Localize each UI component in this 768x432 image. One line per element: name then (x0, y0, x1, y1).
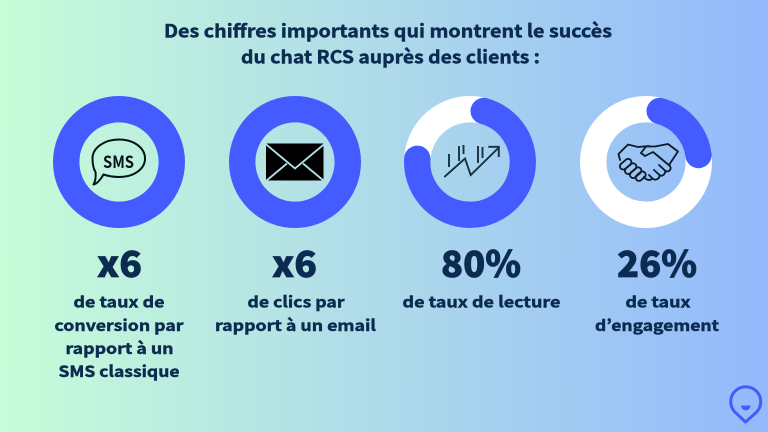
title: Des chiffres importants qui montrent le succès (164, 18, 612, 44)
big number: x6 (272, 236, 317, 288)
icon: envelope (265, 144, 325, 181)
ring background (593, 109, 699, 215)
big number: 26% (617, 236, 697, 288)
big number: x6 (97, 236, 142, 288)
description: de clics par (248, 290, 345, 312)
ring: full blue (66, 109, 172, 215)
description: de taux (626, 290, 691, 312)
ring value (417, 111, 523, 215)
panel: x6 clics (215, 109, 376, 336)
panel: 80% lecture (402, 109, 560, 312)
panel: 26% engagement (593, 109, 720, 336)
description (595, 290, 720, 336)
description (215, 290, 376, 336)
title: du chat RCS auprès des clients : (241, 44, 540, 70)
description: rapport à un email (215, 314, 376, 336)
description: rapport à un (66, 337, 174, 359)
icon: SMS speech bubble (92, 140, 145, 184)
description: SMS classique (58, 360, 180, 382)
panel: x6 conversion (54, 109, 184, 382)
ring background (417, 109, 523, 215)
description: d’engagement (595, 314, 720, 336)
description: conversion par (54, 314, 184, 336)
ring: full blue (242, 109, 348, 215)
description: de taux de lecture (402, 290, 560, 312)
icon: growth chart (444, 145, 499, 177)
title (164, 18, 612, 70)
description: de taux de (74, 290, 164, 312)
icon: logo speech bubble (731, 387, 761, 422)
description (54, 290, 184, 382)
icon: handshake (618, 144, 678, 182)
big number: 80% (441, 236, 521, 288)
icon: SMS speech bubble: SMS (103, 149, 134, 173)
ring value (660, 111, 698, 155)
